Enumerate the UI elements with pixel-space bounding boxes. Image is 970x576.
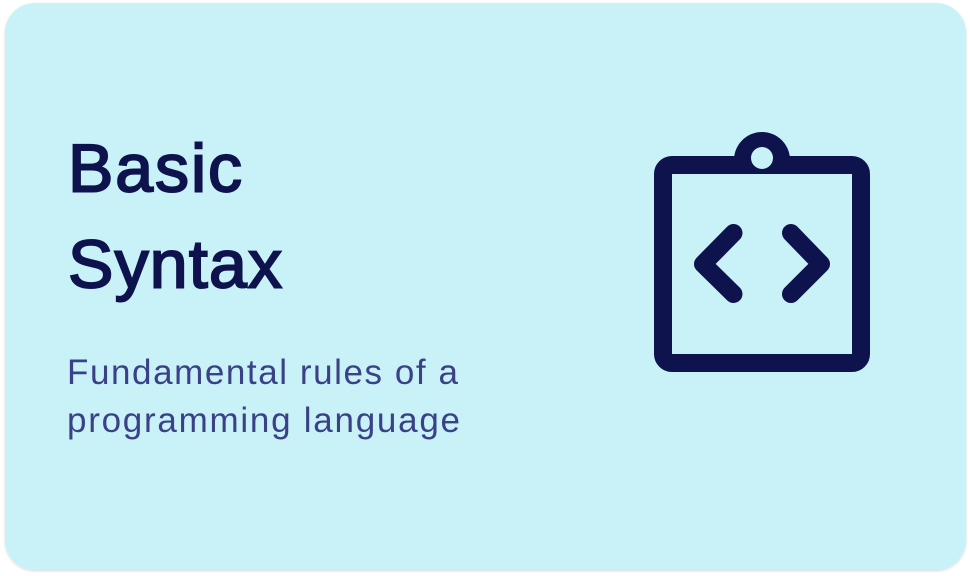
heading: Basic Syntax: Basic (68, 130, 242, 206)
heading: Basic Syntax: Syntax (68, 226, 282, 302)
icon: clipboard with code brackets (663, 132, 861, 363)
text block: description (67, 353, 460, 440)
text block: description: Fundamental rules of a (67, 353, 459, 392)
text block: description: programming language (67, 401, 460, 440)
heading: Basic Syntax (68, 130, 282, 302)
